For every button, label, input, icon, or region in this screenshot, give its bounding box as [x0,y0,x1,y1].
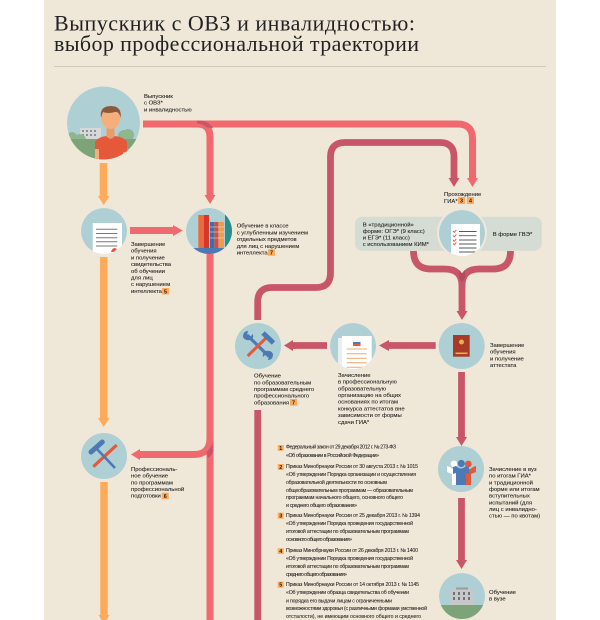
text: secondary vocational education: 7 [292,400,295,406]
text: secondary vocational education: программам среднего [254,387,315,393]
text: secondary vocational education: профессионального [254,394,310,400]
arrow: certificate to advanced class [130,225,183,236]
arrow: to vocational training [131,438,214,460]
text: university admission: вступительных [489,494,530,500]
text: secondary vocational education: по образовательным [254,380,311,386]
label: state exam: ГИА* [444,199,458,205]
icon: attestat booklet [439,323,485,369]
icon: hammer and bar [81,433,127,479]
reference 2: программам начального общего, основного общего [286,495,403,501]
icon: three students [438,446,484,492]
text: secondary vocational education: образования [254,400,289,406]
text: university admission: Зачисление в вуз [489,467,537,473]
text: certificate of training [131,242,172,295]
label: attestat: и получение [490,356,525,362]
label: university study: Обучение [489,590,517,596]
reference 5: 5 [279,583,282,589]
arrow: vocational training down [98,482,110,620]
label: university study: в вузе [489,597,506,603]
text: secondary vocational education: Обучение [254,374,282,380]
reference 2: «Об утверждении Порядка организации и осуществления [286,472,416,478]
reference 2 [278,464,418,509]
text: university admission: по итогам ГИА* [489,474,532,480]
reference 4: 4 [279,549,282,555]
reference 2: Приказ Минобрнауки России от 30 августа 2013 г. № 1015 [286,464,418,470]
reference 1 [278,444,396,459]
text: certificate of training: и получение [131,255,166,261]
label: graduate: с ОВЗ* [144,101,163,107]
arrow: exam forms fork to attestat [414,251,510,320]
reference 5: и порядка его выдачи лицам с ограниченными [286,598,392,604]
text: enrolment in vocational school: зависимости от формы [338,413,402,419]
arrow: secondary vocational loop to state exam [258,142,460,320]
text: traditional form: В «традиционной» [363,221,415,228]
icon: certificate document [81,208,127,255]
text: class with advanced study: для лиц с нарушением [237,244,299,250]
arrow: enrolment to vocational education [284,340,327,351]
icon: books on shelf [186,208,232,254]
text: certificate of training: 5 [164,289,167,295]
reference 5 [278,582,427,620]
text: secondary vocational education [254,374,315,406]
arrow: vocational education down [254,410,261,620]
reference 5: «Об утверждении образца свидетельства об обучении [286,590,409,596]
reference 5: возможностями здоровья (с различными формами умственной [286,605,427,612]
text: enrolment in vocational school: Зачисление [338,373,371,379]
reference 2: общеобразовательным программам — образовательным [286,488,413,494]
text: enrolment in vocational school: в профессиональную [338,380,397,386]
icon: crossed wrench and hammer [235,323,281,369]
reference 1: 1 [279,446,282,452]
text: vocational training: ное обучение [131,474,169,480]
text: university admission: форме или итогам [489,487,540,493]
label: state exam: Прохождение [444,192,482,198]
title: Выпускник с ОВЗ и инвалидностью: [54,10,415,36]
text: vocational training: по программам [131,480,173,486]
arrow: admission to university [456,498,467,569]
reference 3: 3 [279,514,282,520]
text: certificate of training: с нарушением [131,282,170,288]
text: enrolment in vocational school: основаниях по итогам [338,400,398,406]
icon: document pile with flag [330,323,376,372]
text: vocational training [131,467,184,500]
reference 3: основного общего образования» [286,537,352,543]
label: state exam: 4 [469,199,472,205]
reference 3: итоговой аттестации по образовательным программам [286,528,409,535]
reference 4: итоговой аттестации по образовательным программам [286,563,409,570]
text: class with advanced study: отдельных предметов [237,237,297,243]
text: vocational training: 6 [164,494,167,500]
label: attestat: аттестата [490,363,517,369]
text: university admission: стью — по квотам) [489,514,540,520]
icon: graduate portrait [67,86,140,160]
reference 4: среднего общего образования» [286,572,347,578]
text: university admission: и традиционной [489,479,533,486]
reference 5: отсталости), не имеющим основного общего и среднего [286,614,421,620]
reference 2: образовательной деятельности по основным [286,479,387,486]
text: certificate of training: обучения [131,249,157,255]
text: certificate of training: Завершение [131,242,166,248]
reference 4: «Об утверждении Порядка проведения государственной [286,555,413,562]
text: traditional form: и ЕГЭ* (11 класс) [363,236,410,242]
arrow: graduate to certificate [98,163,110,205]
text: class with advanced study: с углубленным изучением [237,230,308,236]
label: state exam: 3 [460,199,463,205]
reference 3: Приказ Минобрнауки России от 25 декабря 2013 г. № 1394 [286,513,420,519]
reference 1: Федеральный закон от 29 декабря 2012 г. № 273-ФЗ [286,444,396,450]
text: certificate of training: интеллекта [131,289,163,295]
text: university admission: лиц с инвалидно- [489,507,537,513]
text: enrolment in vocational school: сдачи ГИА* [338,420,370,426]
title: выбор профессиональной траектории [54,31,419,56]
reference 2: 2 [279,465,282,471]
text: class with advanced study [237,224,308,257]
reference 3 [278,513,420,543]
label: attestat: обучения [490,350,516,356]
text: class with advanced study: 7 [270,251,273,257]
text: GVE form: В форме ГВЭ* [493,232,533,238]
text: traditional form: форме: ОГЭ* (9 класс) [363,229,425,235]
text: class with advanced study: интеллекта [237,250,268,256]
reference 5: Приказ Минобрнауки России от 14 октября 2013 г. № 1145 [286,582,419,588]
text: enrolment in vocational school: образовательную [338,386,387,392]
arrow: attestat to university admission [456,372,467,446]
arrow: graduate to advanced class [197,120,216,204]
title [54,10,419,56]
icon: exam checklist [437,208,487,258]
text: class with advanced study: Обучение в классе [237,224,289,230]
arrow: certificate to vocational training [98,257,110,427]
reference 3: «Об утверждении Порядка проведения государственной [286,520,413,527]
arrow: attestat to enrolment [379,340,436,351]
reference 4 [278,548,418,578]
text: enrolment in vocational school: конкурса аттестатов вне [338,406,405,412]
text: university admission: испытаний (для [489,499,532,506]
text: vocational training: профессиональной [131,486,184,493]
label: graduate: и инвалидностью [144,107,192,113]
text: certificate of training: для лиц [131,276,153,282]
label: graduate: Выпускник [144,94,173,100]
text: certificate of training: свидетельства [131,262,172,268]
text: enrolment in vocational school: организацию на общих [338,393,401,399]
reference 2: и среднего общего образования» [286,503,357,509]
label: state exam [444,192,482,205]
text: vocational training: Профессиональ- [131,467,177,473]
arrow: advanced class down [206,254,214,620]
reference 4: Приказ Минобрнауки России от 26 декабря 2013 г. № 1400 [286,548,418,554]
icon: university building [439,573,485,619]
text: vocational training: подготовки [131,494,161,500]
label: attestat: Завершение [490,343,525,349]
arrow: graduate to state exam [143,124,478,187]
text: traditional form: с использованием КИМ* [363,242,430,248]
reference 1: «Об образовании в Российской Федерации» [286,452,379,459]
panel: exam forms [355,217,542,251]
legal references list [278,444,427,620]
text: certificate of training: об обучении [131,269,165,275]
